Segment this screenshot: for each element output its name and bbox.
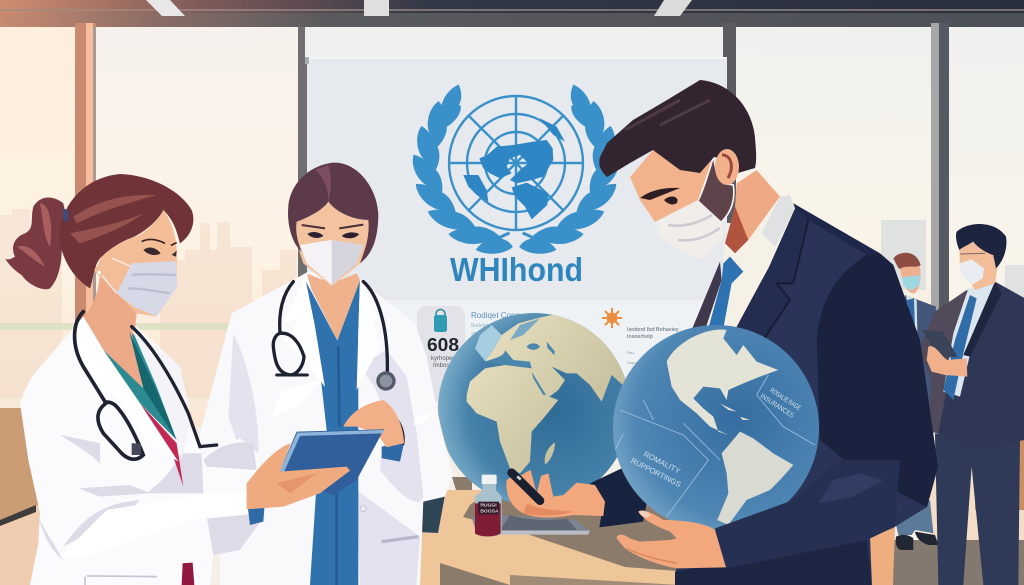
nurse ponytail bbox=[5, 197, 68, 289]
shirt bbox=[720, 195, 795, 330]
open hand bbox=[506, 470, 605, 518]
stat card: 608 bbox=[427, 335, 459, 355]
shirt bbox=[943, 282, 995, 397]
emblem: continents bbox=[463, 118, 565, 219]
hand bbox=[617, 511, 726, 568]
land: south america bbox=[717, 432, 793, 525]
background person behind bbox=[893, 253, 938, 550]
tie bbox=[708, 257, 743, 328]
sleeve cuff bbox=[590, 468, 647, 527]
face bbox=[97, 210, 177, 317]
blue cuffs bbox=[247, 498, 265, 525]
trousers bbox=[935, 433, 1020, 585]
nurse bbox=[5, 174, 262, 585]
laptop bbox=[465, 515, 590, 534]
neck bbox=[83, 273, 143, 390]
chair peek bbox=[415, 495, 445, 533]
bottle bbox=[475, 475, 502, 536]
hair bbox=[599, 80, 756, 177]
globe label left: RUPPORTINGS bbox=[629, 456, 682, 489]
globe label left: ROMALITY bbox=[642, 449, 682, 476]
stat card: Imbos bbox=[433, 363, 449, 369]
lower hand and sleeve bbox=[617, 460, 900, 585]
info text left: Rodiqet Cono bbox=[471, 311, 520, 320]
map lines bbox=[613, 375, 815, 517]
land: eurasia bbox=[485, 313, 633, 402]
land: rim crescent bbox=[438, 410, 449, 454]
ceiling bbox=[0, 0, 1024, 28]
globe 2 bbox=[613, 325, 819, 531]
collar bbox=[75, 317, 178, 462]
glasses bbox=[960, 252, 985, 255]
tablet bbox=[922, 330, 957, 358]
brow and eye bbox=[640, 188, 680, 204]
lapels bbox=[283, 271, 325, 387]
face bbox=[630, 150, 713, 222]
globe 1 bbox=[437, 313, 633, 505]
table items bbox=[465, 468, 647, 536]
lapel bbox=[963, 282, 1002, 357]
globe label right: ROSALIE RAGE bbox=[768, 387, 802, 412]
tie bbox=[943, 295, 977, 400]
lower board panel bbox=[307, 300, 707, 405]
stethoscope bbox=[273, 282, 394, 389]
seas: mediterranean, black, caspian, red bbox=[485, 342, 555, 395]
neck bbox=[725, 170, 780, 253]
man's head bbox=[599, 80, 756, 259]
doctor coat bbox=[200, 272, 453, 585]
info text right: Isoderd Ibd Behaviey bbox=[627, 327, 679, 333]
eye and brow bbox=[143, 248, 177, 257]
land: northern inlets bbox=[475, 325, 502, 361]
tablet bbox=[278, 429, 384, 495]
forearm bbox=[715, 460, 900, 568]
doctor head bbox=[288, 163, 378, 287]
ear bbox=[95, 265, 104, 275]
neck and face bbox=[959, 242, 998, 290]
whiteboard with UN-style emblem bbox=[305, 57, 727, 302]
strap shadow bbox=[698, 160, 734, 223]
hands bbox=[927, 346, 967, 377]
globe foot shadow bbox=[500, 515, 577, 530]
land: africa bbox=[467, 365, 558, 473]
info text right: Insoerhelp bbox=[627, 334, 653, 340]
hair bbox=[956, 224, 1006, 268]
suit shoulder edge bbox=[793, 203, 880, 255]
ear bbox=[715, 149, 739, 185]
info text left: agn bbox=[471, 331, 480, 337]
nurse coat bbox=[20, 317, 262, 585]
doctor hands and tablet bbox=[247, 400, 418, 542]
land: madagascar bbox=[545, 442, 555, 464]
stat card: kyrhoper bbox=[431, 356, 454, 362]
icon: sun-virus bbox=[602, 308, 622, 328]
jacket bbox=[919, 282, 1024, 448]
phone bbox=[512, 473, 540, 501]
torso bottom bbox=[675, 540, 872, 585]
emblem: polar grid bbox=[449, 96, 583, 230]
info text left bbox=[471, 311, 520, 337]
suit sleeve bbox=[817, 253, 938, 507]
window frames bbox=[75, 23, 949, 407]
land: caribbean bbox=[720, 403, 750, 420]
nurse hair bbox=[59, 174, 193, 288]
mask bbox=[959, 259, 984, 285]
globe label right: INSURANCES bbox=[759, 393, 795, 420]
lower hand bbox=[247, 443, 350, 509]
bottle: BOOSA bbox=[480, 508, 499, 514]
stethoscope bbox=[75, 312, 217, 459]
emblem: wreath bbox=[410, 83, 622, 254]
suit torso bbox=[675, 203, 938, 585]
scrubs bbox=[103, 333, 177, 440]
upper hand bbox=[343, 400, 404, 447]
info text right bbox=[627, 327, 679, 365]
info text right: Risi bbox=[627, 350, 634, 355]
stat card bbox=[417, 306, 465, 402]
info text left: Badegn bbox=[471, 323, 488, 329]
left lapel bbox=[692, 262, 722, 330]
info text right: Suporin bbox=[627, 360, 641, 365]
land: north america bbox=[667, 329, 778, 435]
mask bbox=[655, 200, 723, 259]
globe label right bbox=[760, 388, 802, 418]
background man with tablet bbox=[919, 224, 1024, 585]
emblem: title: WHIhond bbox=[450, 251, 583, 288]
doctor with tablet bbox=[200, 163, 453, 585]
floor and furniture bbox=[0, 398, 1024, 585]
main businessman bbox=[675, 157, 938, 585]
suit lapel bbox=[730, 208, 808, 340]
windows with skyline bbox=[0, 27, 1024, 447]
skin and scrub V bbox=[307, 273, 362, 341]
bottle: RUGGI bbox=[480, 503, 497, 509]
mask bbox=[300, 240, 363, 285]
mask bbox=[117, 261, 177, 317]
